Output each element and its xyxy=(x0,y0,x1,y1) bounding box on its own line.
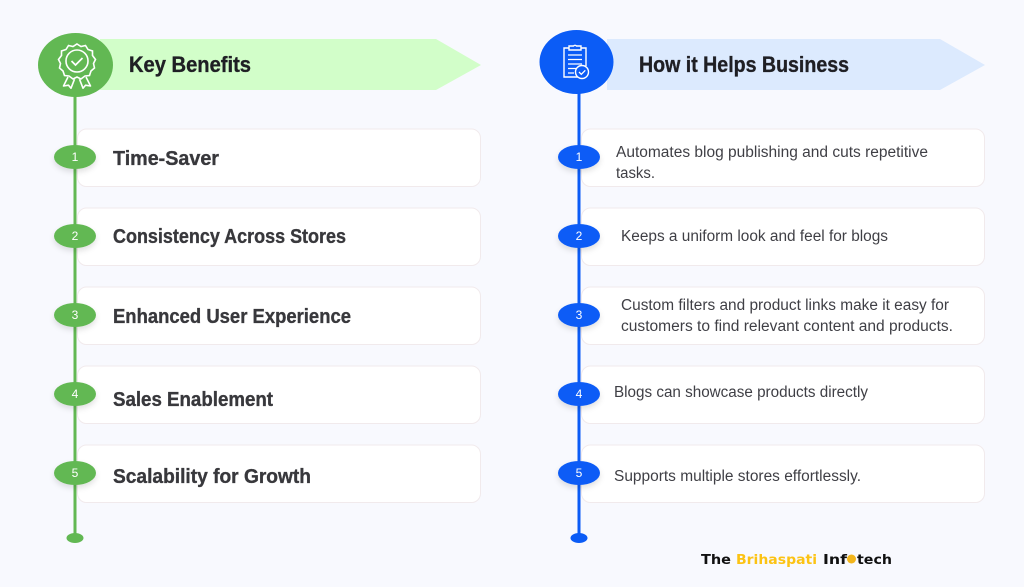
item 1: time-saver: Time-Saver xyxy=(113,148,219,170)
item 4: sales enablement xyxy=(54,366,480,424)
item 1: time-saver: 1 xyxy=(72,150,79,164)
timeline: key benefits xyxy=(74,95,76,536)
item 4: showcase products: 4 xyxy=(576,387,583,401)
panel: how it helps business xyxy=(540,30,985,543)
item 3: enhanced user experience: 3 xyxy=(72,308,79,322)
logo: the brihaspati infotech: Inf xyxy=(823,552,847,568)
item 2: consistency across stores: 2 xyxy=(72,229,79,243)
logo: the brihaspati infotech xyxy=(701,552,892,568)
item 2: uniform look and feel: 2 xyxy=(576,229,583,243)
item 5: supports multiple stores: Supports multiple stores effortlessly. xyxy=(614,468,861,485)
item 3: custom filters and product links xyxy=(558,287,984,344)
item 4: showcase products: Blogs can showcase products directly xyxy=(614,384,868,401)
item 3: custom filters and product links: Custom filters and product links make it easy for xyxy=(621,297,949,314)
item 1: automates blog publishing: 1 xyxy=(576,150,583,164)
heading: how it helps business: How it Helps Business xyxy=(639,52,849,77)
timeline: how it helps business xyxy=(578,90,580,536)
logo: the brihaspati infotech: The xyxy=(701,552,731,568)
heading icon: clipboard check xyxy=(540,30,614,94)
heading banner: key benefits xyxy=(100,39,481,90)
item 2: uniform look and feel xyxy=(558,208,984,266)
logo: the brihaspati infotech: Brihaspati xyxy=(736,552,817,568)
item 1: automates blog publishing: Automates blog publishing and cuts repetitive xyxy=(616,144,928,161)
item 4: showcase products xyxy=(558,366,984,424)
item 2: consistency across stores xyxy=(54,208,480,266)
timeline end dot xyxy=(66,533,84,543)
timeline end dot xyxy=(570,533,588,543)
item 1: automates blog publishing: tasks. xyxy=(616,165,655,182)
item 4: sales enablement: Sales Enablement xyxy=(113,389,273,411)
item 3: enhanced user experience xyxy=(54,287,480,344)
item 5: supports multiple stores: 5 xyxy=(576,466,583,480)
item 5: scalability for growth: 5 xyxy=(72,466,79,480)
item 5: supports multiple stores xyxy=(558,445,984,502)
item 2: uniform look and feel: Keeps a uniform look and feel for blogs xyxy=(621,228,888,245)
logo: the brihaspati infotech: tech xyxy=(857,552,892,568)
heading icon: award badge xyxy=(38,33,113,97)
panel: key benefits xyxy=(38,33,481,543)
heading banner: how it helps business xyxy=(607,39,985,90)
item 4: sales enablement: 4 xyxy=(72,387,79,401)
item 5: scalability for growth xyxy=(54,445,480,502)
item 3: custom filters and product links: 3 xyxy=(576,308,583,322)
item 2: consistency across stores: Consistency Across Stores xyxy=(113,226,346,248)
item 3: custom filters and product links: customers to find relevant content and products. xyxy=(621,318,953,335)
item 3: enhanced user experience: Enhanced User Experience xyxy=(113,306,351,328)
item 5: scalability for growth: Scalability for Growth xyxy=(113,466,311,488)
heading: key benefits: Key Benefits xyxy=(129,52,251,77)
item 1: time-saver xyxy=(54,129,480,186)
item 1: automates blog publishing xyxy=(558,129,984,186)
